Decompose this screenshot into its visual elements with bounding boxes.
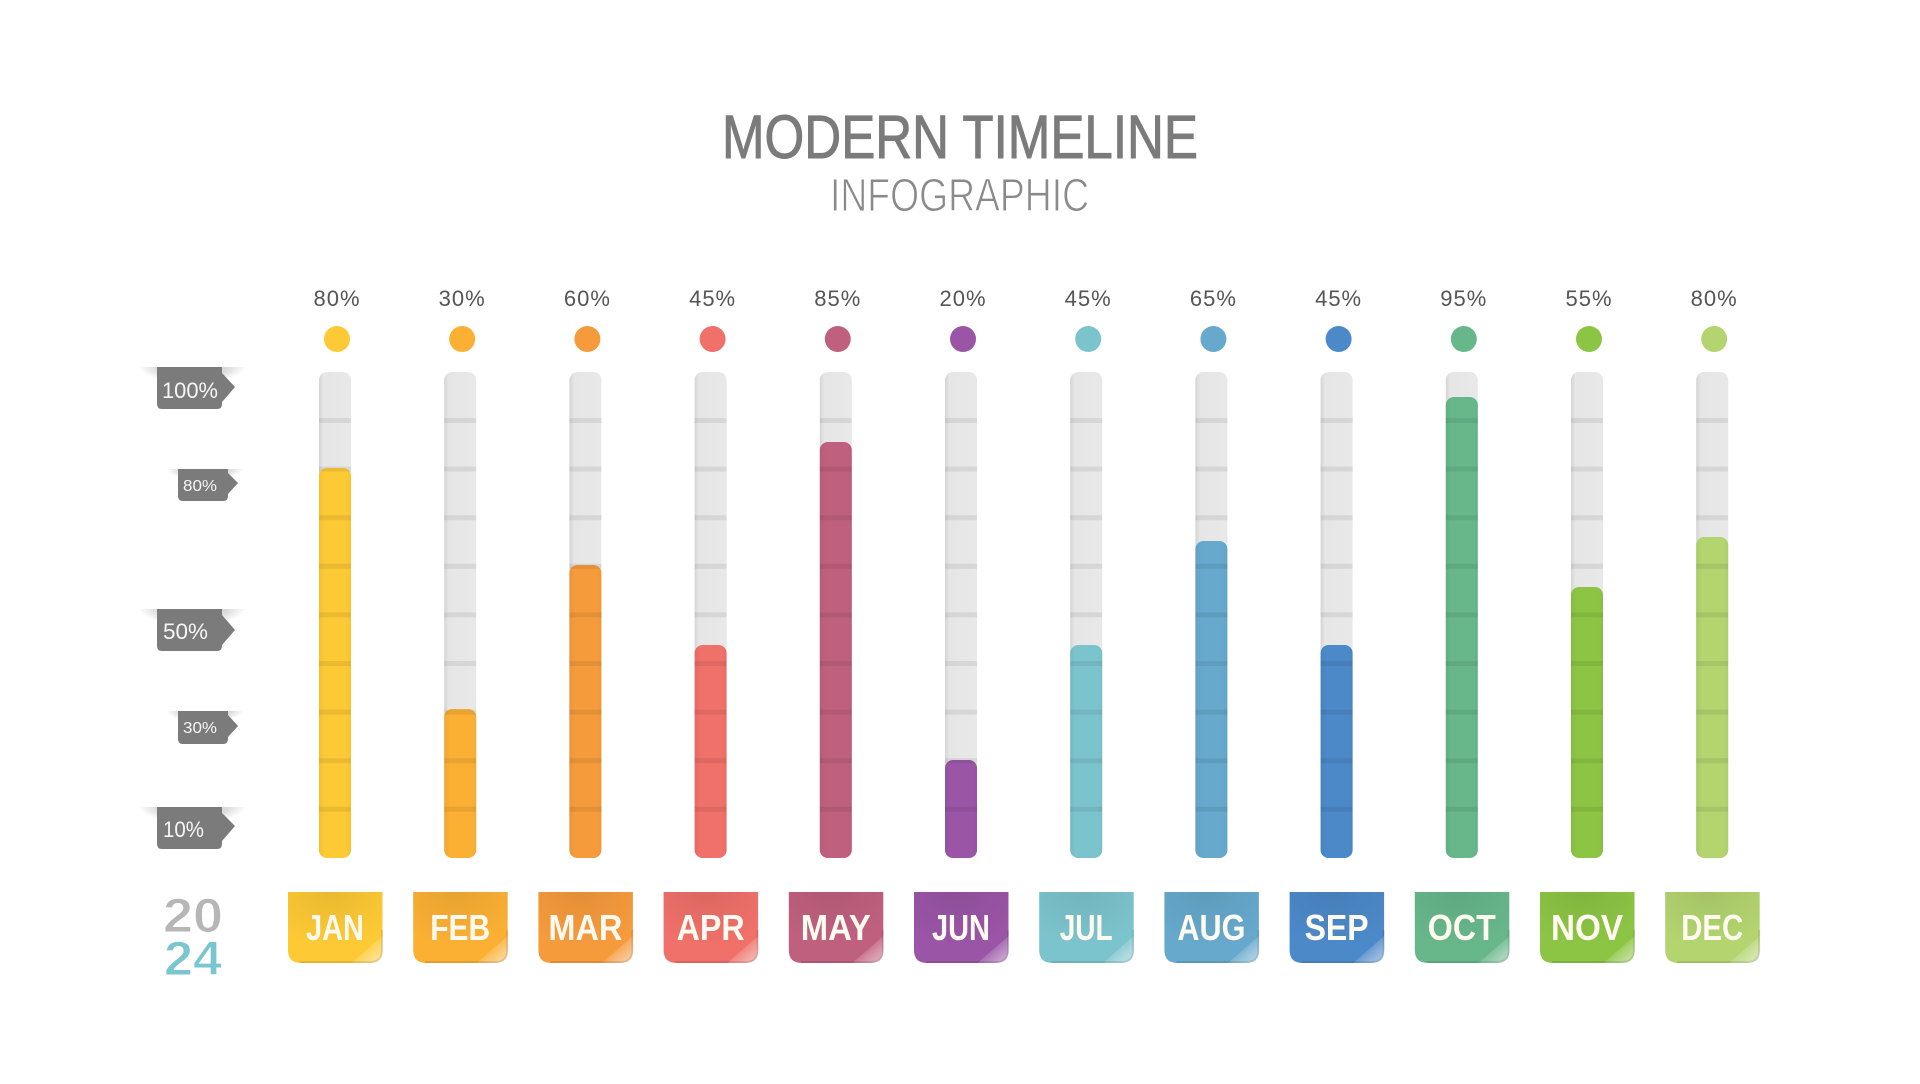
column: May: 85% [814,286,861,311]
column: March: MAR [548,907,622,948]
column: November: 55% [1565,286,1613,311]
heading: modern timeline: MODERN TIMELINE [722,103,1198,171]
column: November: NOV [1551,907,1623,948]
column: April: 45% [689,286,736,311]
column: March [538,286,633,963]
year 2024 [163,890,223,986]
column: February: FEB [430,907,490,948]
column: December: 80% [1691,286,1738,311]
subheading: infographic: INFOGRAPHIC [830,169,1089,221]
tag: 80%: 80% [183,478,217,495]
year 2024: 20 [163,890,223,943]
column: October: OCT [1428,907,1496,948]
scale tags [139,367,246,849]
column: March: 60% [564,286,611,311]
column: May [789,286,883,963]
tag: 100% [139,367,246,409]
column: July: JUL [1060,907,1113,948]
tag: 50%: 50% [163,619,208,644]
column: January [288,286,382,963]
column: April [664,286,758,963]
column: December: DEC [1681,907,1743,948]
column: January: JAN [306,907,364,948]
column: August [1164,286,1259,963]
column: May: MAY [801,907,871,948]
column: June [914,286,1008,963]
title [722,103,1198,221]
tag: 10% [139,807,246,849]
column: June: 20% [939,286,987,311]
column: April: APR [677,907,745,948]
tag: 30%: 30% [183,720,217,737]
tag: 10%: 10% [163,817,204,842]
tag: 30% [166,711,244,744]
column: July [1039,286,1134,963]
column: January: 80% [313,286,361,311]
column: October: 95% [1440,286,1487,311]
column: August: AUG [1177,907,1245,948]
tag: 50% [139,609,246,651]
tag: 100%: 100% [162,378,218,403]
column: November [1540,286,1634,963]
column: September [1290,286,1384,963]
tag: 80% [166,469,244,501]
column: December [1665,286,1760,963]
column: October [1415,286,1509,963]
column: February: 30% [439,286,486,311]
column: September: SEP [1305,907,1369,948]
column: September: 45% [1315,286,1362,311]
year 2024: 24 [164,933,222,986]
column: July: 45% [1065,286,1112,311]
column: June: JUN [932,907,990,948]
column: August: 65% [1190,286,1237,311]
column: February [413,286,508,963]
